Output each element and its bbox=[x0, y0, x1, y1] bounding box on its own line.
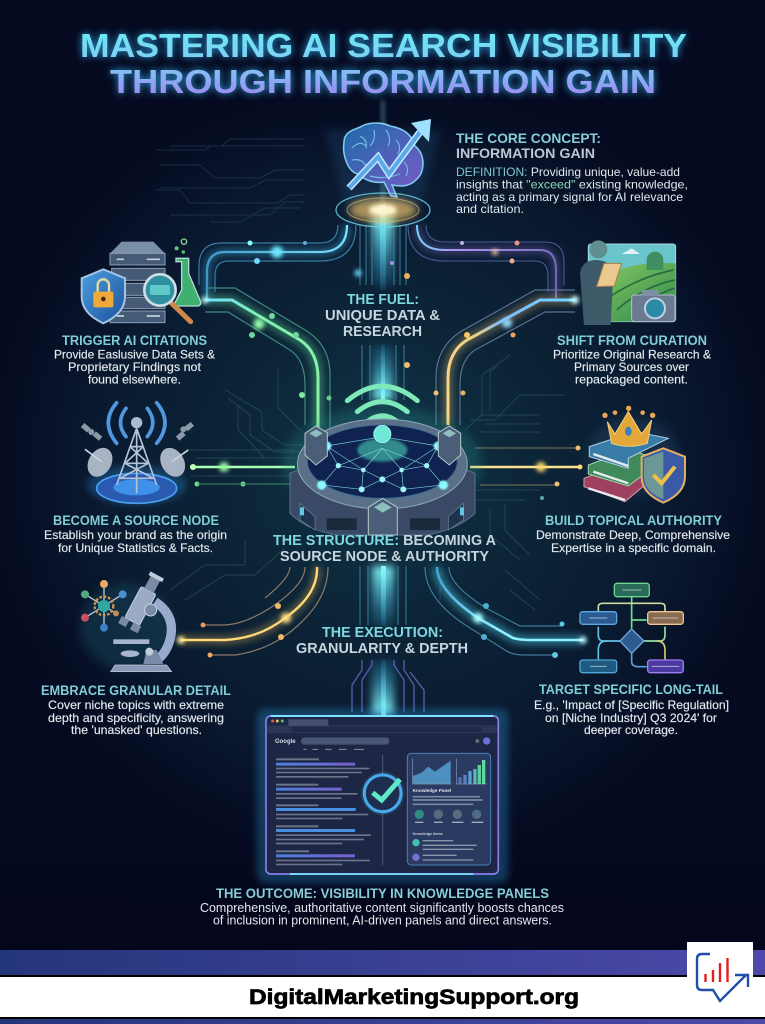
outcome text bbox=[200, 885, 564, 928]
target specific long-tail text: TARGET SPECIFIC LONG-TAIL bbox=[539, 682, 723, 697]
knowledge panel card: Knowledge Items bbox=[413, 832, 443, 836]
outcome text: THE OUTCOME: VISIBILITY IN KNOWLEDGE PANELS bbox=[216, 885, 549, 901]
outcome text: of inclusion in prominent, AI-driven panels and direct answers. bbox=[213, 914, 552, 928]
check mark badge bbox=[362, 773, 403, 814]
wifi signal arcs bbox=[347, 386, 417, 422]
core concept text: DEFINITION: Providing unique, value-add bbox=[456, 165, 680, 179]
search result lines bbox=[276, 758, 371, 865]
trigger AI citations text: Proprietary Findings not bbox=[68, 361, 202, 374]
tower blocks bbox=[305, 426, 461, 535]
embrace granular detail text: Cover niche topics with extreme bbox=[48, 699, 224, 712]
target specific long-tail text: E.g., 'Impact of [Specific Regulation] bbox=[534, 699, 729, 712]
crown bbox=[602, 406, 655, 446]
connector: top-left cyan to trigger citations bbox=[199, 225, 362, 300]
target specific long-tail text bbox=[534, 682, 729, 737]
icon: broadcast tower bbox=[81, 403, 194, 505]
core concept text: acting as a primary signal for AI relevance bbox=[456, 190, 683, 204]
knowledge panel card: Knowledge Panel bbox=[413, 788, 451, 793]
build topical authority text: BUILD TOPICAL AUTHORITY bbox=[545, 513, 722, 528]
shift from curation text bbox=[553, 333, 711, 386]
icon: researcher with photo and camera bbox=[580, 240, 676, 325]
shift from curation text: Prioritize Original Research & bbox=[553, 348, 711, 362]
embrace granular detail text: depth and specificity, answering bbox=[48, 712, 224, 725]
the structure label: SOURCE NODE & AUTHORITY bbox=[280, 548, 489, 565]
target specific long-tail text: deeper coverage. bbox=[584, 724, 678, 737]
browser window with knowledge panel bbox=[257, 708, 508, 883]
the execution label: GRANULARITY & DEPTH bbox=[296, 640, 468, 657]
icon: shield with lock bbox=[82, 269, 125, 323]
build topical authority text bbox=[536, 513, 730, 555]
core concept icon: brain with rising arrow bbox=[325, 100, 441, 205]
dish bbox=[297, 419, 467, 509]
the fuel label: THE FUEL: bbox=[347, 291, 419, 308]
become a source node text: Establish your brand as the origin bbox=[44, 529, 227, 542]
faint circuit traces top-left bbox=[155, 139, 305, 222]
footer band bbox=[0, 950, 765, 1024]
shift from curation text: Primary Sources over bbox=[574, 361, 689, 374]
connector: green horizontal to source node bbox=[190, 462, 295, 486]
the fuel label: RESEARCH bbox=[343, 323, 422, 340]
connector: amber route to granular detail bbox=[177, 567, 328, 658]
footer site name: DigitalMarketingSupport.org bbox=[249, 986, 579, 1009]
the fuel label: UNIQUE DATA & bbox=[325, 307, 440, 324]
become a source node text: BECOME A SOURCE NODE bbox=[53, 513, 219, 528]
core concept text: insights that "exceed" existing knowledge, bbox=[456, 178, 688, 192]
title: MASTERING AI SEARCH VISIBILITY bbox=[80, 27, 687, 64]
knowledge panel card bbox=[407, 753, 491, 865]
shift from curation text: repackaged content. bbox=[575, 374, 688, 386]
build topical authority text: Expertise in a specific domain. bbox=[551, 542, 716, 555]
outcome text: Comprehensive, authoritative content significantly boosts chances bbox=[200, 901, 564, 915]
the execution label: THE EXECUTION: bbox=[322, 624, 443, 641]
trigger AI citations text: Provide Easlusive Data Sets & bbox=[54, 348, 215, 362]
become a source node text bbox=[44, 513, 227, 555]
shield with check bbox=[642, 448, 685, 503]
connector: amber horizontal to topical authority bbox=[470, 446, 582, 500]
icon: magnifier bbox=[144, 274, 191, 322]
embrace granular detail text: EMBRACE GRANULAR DETAIL bbox=[41, 683, 231, 698]
trigger AI citations text: found elsewhere. bbox=[88, 374, 181, 386]
network bbox=[322, 437, 443, 489]
icon: flask bbox=[173, 239, 201, 306]
embrace granular detail text: the 'unasked' questions. bbox=[71, 724, 202, 737]
target specific long-tail text: on [Niche Industry] Q3 2024' for bbox=[545, 712, 717, 725]
title bbox=[80, 27, 687, 100]
build topical authority text: Demonstrate Deep, Comprehensive bbox=[536, 529, 730, 542]
browser window with knowledge panel: Google bbox=[275, 739, 296, 745]
icon: microscope and molecule bbox=[80, 569, 173, 672]
title: THROUGH INFORMATION GAIN bbox=[110, 63, 656, 100]
central source node hub bbox=[282, 386, 482, 535]
faint circuit traces around the central node bbox=[170, 355, 565, 610]
base walls bbox=[290, 470, 475, 535]
central vertical data streams bbox=[352, 205, 424, 716]
glowing portal under brain bbox=[336, 193, 430, 227]
connector: blue to amber route to central node bbox=[404, 290, 579, 425]
connector: cyan route to long-tail bbox=[425, 567, 586, 658]
icon: flowchart bbox=[580, 583, 683, 673]
the execution label bbox=[296, 624, 468, 657]
core concept text: and citation. bbox=[456, 202, 524, 216]
core concept text: THE CORE CONCEPT: bbox=[456, 130, 601, 146]
icon: server shield magnifier flask bbox=[82, 239, 201, 323]
trigger AI citations text bbox=[54, 333, 215, 386]
the structure label: THE STRUCTURE: BECOMING A bbox=[273, 532, 496, 549]
connector: top-right purple route bbox=[390, 225, 564, 298]
icon: books crown and shield bbox=[584, 406, 685, 503]
trigger AI citations text: TRIGGER AI CITATIONS bbox=[62, 333, 207, 348]
connector: green route to central node bbox=[202, 288, 332, 430]
shift from curation text: SHIFT FROM CURATION bbox=[557, 333, 707, 348]
core concept text bbox=[456, 130, 688, 216]
the structure label bbox=[273, 532, 496, 565]
core concept text: INFORMATION GAIN bbox=[456, 145, 595, 161]
embrace granular detail text bbox=[41, 683, 231, 737]
become a source node text: for Unique Statistics & Facts. bbox=[58, 542, 213, 555]
the fuel label bbox=[325, 291, 440, 340]
footer logo bbox=[687, 942, 753, 1001]
